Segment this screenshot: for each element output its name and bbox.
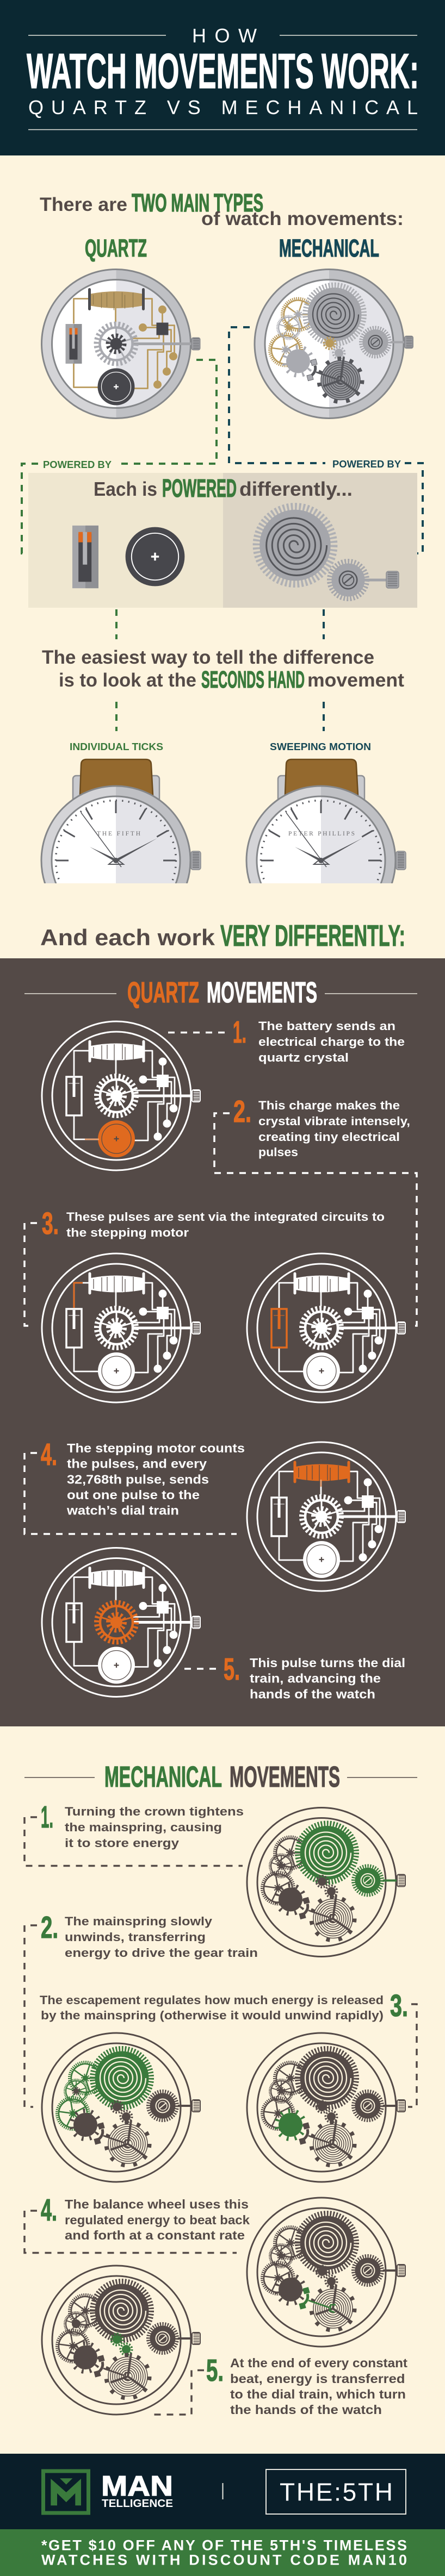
step number 5: 5. — [224, 1652, 240, 1687]
panel heading: Each is — [94, 478, 157, 500]
footer: discount code: *GET $10 OFF ANY OF THE 5TH'S TIMELESS — [41, 2537, 407, 2554]
text: step 2: creating tiny electrical — [258, 1130, 400, 1144]
label: quartz: QUARTZ — [85, 234, 147, 262]
text: seconds hand difference: The easiest way to tell the difference — [42, 647, 374, 668]
icon: mainspring gear — [256, 507, 334, 584]
text: step 4: watch’s dial train — [66, 1504, 179, 1518]
connector: mech step 1 — [24, 1817, 243, 1866]
diagram: mech step 4 lever highlighted — [247, 2198, 405, 2347]
text: step 4: the pulses, and every — [67, 1457, 207, 1471]
label: mechanical: MECHANICAL — [279, 234, 379, 262]
connector: mech step 2 — [24, 1925, 37, 2107]
text: mech step 5: At the end of every constant — [230, 2356, 407, 2370]
text: mech step 5: the hands of the watch — [230, 2403, 382, 2417]
illustration: quartz watch movement — [41, 270, 200, 419]
text: mech step 2: The mainspring slowly — [65, 1914, 213, 1928]
connector: step 1 — [168, 1032, 227, 1033]
footer: discount code — [0, 2529, 445, 2576]
panel heading — [94, 474, 353, 502]
intro heading: of watch movements: — [201, 208, 404, 229]
watch: peter phillips — [246, 759, 406, 935]
logo: the 5th — [266, 2469, 406, 2514]
text: seconds hand difference: SECONDS HAND — [201, 666, 305, 693]
heading: each work very differently: And each work — [40, 925, 215, 950]
text: step 2: This charge makes the — [258, 1099, 400, 1112]
text: mech step 1: it to store energy — [65, 1836, 180, 1850]
icon: crown gear with stem — [330, 562, 399, 598]
heading: mechanical movements — [24, 1761, 417, 1793]
heading: mechanical movements: MECHANICAL — [104, 1761, 222, 1793]
connector lines to difference text — [116, 609, 324, 639]
subtitle: QUARTZ VS MECHANICAL — [28, 96, 418, 118]
diagram: mech step 5 dial train highlighted — [42, 2266, 200, 2415]
text: mech step 1: Turning the crown tightens — [65, 1805, 244, 1818]
mech step number 2: 2. — [41, 1910, 58, 1945]
diagram: mech step 1 mainspring highlighted — [247, 1808, 405, 1957]
text: mech step 2: unwinds, transferring — [65, 1930, 206, 1944]
powered by label right: POWERED BY — [332, 459, 401, 470]
text: step 4: The stepping motor counts — [67, 1441, 245, 1455]
step number 4: 4. — [41, 1437, 57, 1472]
powered by label left: POWERED BY — [43, 459, 112, 470]
icon: stepping motor — [72, 526, 98, 588]
panel: quartz movements — [0, 958, 445, 1726]
text: mech step 3: The escapement regulates how much energy is released — [40, 1993, 384, 2007]
logo: mantelligence — [44, 2471, 173, 2513]
text: step 5: This pulse turns the dial — [250, 1656, 405, 1670]
text: step 3: the stepping motor — [66, 1226, 189, 1239]
text: seconds hand difference: is to look at the — [59, 670, 196, 691]
text: step 4: out one pulse to the — [67, 1488, 200, 1502]
text: mech step 4 — [65, 2197, 250, 2242]
diagram: step 5 dial train highlighted — [42, 1548, 200, 1697]
text: mech step 2: energy to drive the gear train — [65, 1946, 258, 1960]
text: mech step 3: by the mainspring (otherwise it would unwind rapidly) — [41, 2009, 384, 2022]
label: individual ticks: INDIVIDUAL TICKS — [70, 741, 163, 752]
text: mech step 4: and forth at a constant rate — [65, 2228, 245, 2242]
illustration: mechanical watch movement — [255, 270, 413, 419]
text: step 3: These pulses are sent via the integrated circuits to — [66, 1210, 385, 1224]
panel heading: POWERED — [162, 474, 237, 502]
step number 2: 2. — [233, 1094, 251, 1129]
panel: power sources — [28, 473, 417, 608]
text: step 4 — [66, 1441, 245, 1518]
mech step number 3: 3. — [390, 1988, 408, 2023]
text: step 4: 32,768th pulse, sends — [67, 1472, 209, 1486]
diagram: mech step 2 gear train highlighted — [42, 2033, 200, 2182]
diagram: step 1 battery highlighted — [42, 1021, 200, 1170]
connector: step 3 — [24, 1223, 37, 1326]
text: mech step 5: to the dial train, which turn — [230, 2387, 406, 2402]
text: mech step 4: The balance wheel uses this — [65, 2197, 249, 2211]
text: step 5: hands of the watch — [250, 1687, 375, 1701]
logo: the 5th: THE:5TH — [280, 2478, 393, 2506]
step number 3: 3. — [42, 1206, 59, 1241]
heading: mechanical movements: MOVEMENTS — [230, 1761, 340, 1793]
label: sweeping motion: SWEEPING MOTION — [270, 741, 371, 752]
mech step number 5: 5. — [206, 2353, 224, 2388]
text: mech step 2 — [65, 1914, 258, 1960]
text: mech step 1: the mainspring, causing — [65, 1820, 222, 1834]
watch: the fifth — [41, 759, 201, 935]
text: step 1: quartz crystal — [258, 1051, 349, 1064]
connector: mech step 3 — [408, 2004, 417, 2107]
connector: step 5 — [184, 1668, 217, 1670]
connector: quartz to power — [22, 360, 217, 553]
text: mech step 5 — [230, 2356, 407, 2417]
text: step 2: crystal vibrate intensely, — [258, 1114, 410, 1128]
diagram: step 4 crystal highlighted — [247, 1442, 405, 1591]
footer: discount code: WATCHES WITH DISCOUNT CODE MAN10 — [41, 2552, 407, 2568]
mech step number 4: 4. — [41, 2193, 57, 2228]
text: step 1 — [258, 1019, 405, 1064]
logo: mantelligence: MAN — [101, 2471, 173, 2502]
connector: step 4 — [24, 1453, 237, 1534]
text: step 1: electrical charge to the — [258, 1035, 405, 1049]
text: mech step 3 — [40, 1993, 384, 2022]
text: step 1: The battery sends an — [258, 1019, 395, 1033]
connector: step 2 to step 3 — [214, 1113, 417, 1326]
text: step 2: pulses — [258, 1145, 298, 1159]
text: step 2 — [258, 1099, 410, 1159]
text: step 5: train, advancing the — [250, 1671, 381, 1685]
panel heading: differently... — [239, 478, 353, 500]
footer: logos — [0, 2454, 445, 2529]
text: mech step 1 — [65, 1805, 244, 1850]
text: seconds hand difference: movement — [307, 670, 404, 691]
connector: mech step 4 — [24, 2211, 237, 2253]
diagram: step 3 circuit trace highlighted — [42, 1253, 200, 1402]
text: mech step 5: beat, energy is transferred — [230, 2372, 405, 2386]
heading: how: HOW — [192, 24, 257, 47]
text: 1. — [41, 1800, 53, 1835]
panel heading: QUARTZ — [127, 976, 199, 1009]
logo: mantelligence: TELLIGENCE — [102, 2498, 173, 2510]
text: seconds hand difference — [42, 647, 404, 693]
diagram: step 3 stepping motor highlighted — [247, 1253, 405, 1402]
connector lines to watches — [116, 702, 324, 731]
step number 1: 1. — [233, 1015, 246, 1050]
panel heading: MOVEMENTS — [207, 976, 317, 1009]
text: step 5 — [250, 1656, 405, 1701]
connector: mech step 5 — [151, 2370, 204, 2415]
text: mech step 4: regulated energy to beat back — [65, 2213, 250, 2227]
intro heading: There are — [40, 194, 127, 215]
icon: battery — [126, 527, 184, 586]
header banner — [0, 0, 445, 155]
heading: each work very differently — [40, 919, 405, 952]
connector: mechanical to power — [229, 327, 423, 553]
text: step 3 — [66, 1210, 385, 1239]
intro heading: TWO MAIN TYPES — [132, 189, 263, 217]
diagram: mech step 3 escapement highlighted — [247, 2033, 405, 2182]
panel heading — [127, 976, 317, 1009]
watch: the fifth: THE FIFTH — [97, 831, 140, 837]
intro heading — [40, 189, 404, 229]
watch: peter phillips: PETER PHILLIPS — [288, 831, 355, 837]
